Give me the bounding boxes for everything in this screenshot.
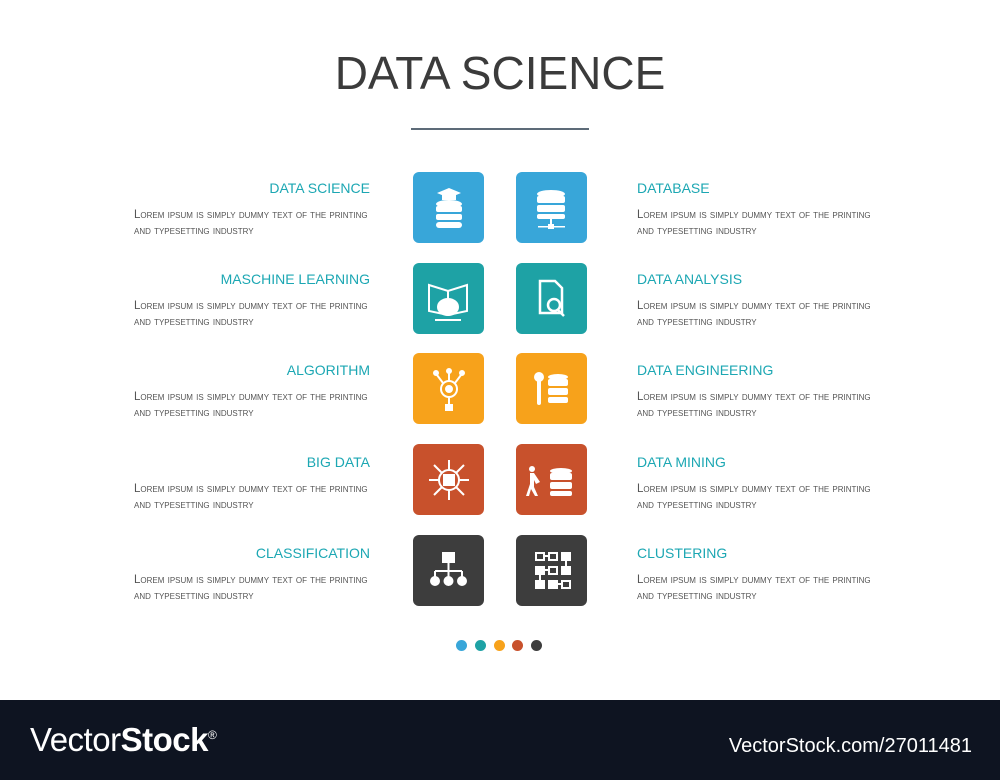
item: machine learning [134, 271, 370, 328]
item: big data: Lorem ipsum is simply dummy text of the printing [134, 483, 368, 495]
icon: clustering [516, 535, 587, 606]
item: data mining: DATA MINING [637, 454, 726, 470]
item: data science: DATA SCIENCE [269, 180, 370, 196]
item: data engineering: Lorem ipsum is simply dummy text of the printing [637, 391, 871, 403]
footer bar [0, 700, 1000, 780]
icon: data analysis [516, 263, 587, 334]
icon: database [516, 172, 587, 243]
icon: classification [413, 535, 484, 606]
icon: data mining [516, 444, 587, 515]
icon: data science [413, 172, 484, 243]
item: machine learning: and typesetting industry [134, 316, 254, 328]
item: big data [134, 454, 370, 511]
item: clustering: and typesetting industry [637, 590, 757, 602]
icon: algorithm [413, 353, 484, 424]
footer url: VectorStock.com/27011481 [729, 735, 972, 757]
item: classification: CLASSIFICATION [256, 545, 370, 561]
item: database: Lorem ipsum is simply dummy text of the printing [637, 209, 871, 221]
item: classification: and typesetting industry [134, 590, 254, 602]
item: algorithm: ALGORITHM [287, 362, 370, 378]
item: algorithm [134, 362, 370, 419]
footer logo: VectorStock® [30, 721, 216, 758]
item: database: DATABASE [637, 180, 710, 196]
item: data science [134, 180, 370, 237]
icon: data engineering [516, 353, 587, 424]
item: clustering: Lorem ipsum is simply dummy text of the printing [637, 574, 871, 586]
item: data analysis [637, 271, 871, 328]
item: machine learning: MASCHINE LEARNING [221, 271, 370, 287]
item: algorithm: and typesetting industry [134, 407, 254, 419]
item: data engineering: and typesetting industry [637, 407, 757, 419]
item: big data: and typesetting industry [134, 499, 254, 511]
item: machine learning: Lorem ipsum is simply dummy text of the printing [134, 300, 368, 312]
item: data analysis: and typesetting industry [637, 316, 757, 328]
pagination dots [456, 640, 542, 651]
item: data analysis: Lorem ipsum is simply dummy text of the printing [637, 300, 871, 312]
item: big data: BIG DATA [307, 454, 370, 470]
item: data science: and typesetting industry [134, 225, 254, 237]
item: database: and typesetting industry [637, 225, 757, 237]
item: algorithm: Lorem ipsum is simply dummy text of the printing [134, 391, 368, 403]
item: clustering: CLUSTERING [637, 545, 727, 561]
item: database [637, 180, 871, 237]
title: DATA SCIENCE [335, 47, 665, 99]
item: classification: Lorem ipsum is simply dummy text of the printing [134, 574, 368, 586]
icon: machine learning [413, 263, 484, 334]
item: data science: Lorem ipsum is simply dummy text of the printing [134, 209, 368, 221]
icon: big data [413, 444, 484, 515]
item: data mining: and typesetting industry [637, 499, 757, 511]
item: clustering [637, 545, 871, 602]
item: data engineering [637, 362, 871, 419]
item: data mining: Lorem ipsum is simply dummy text of the printing [637, 483, 871, 495]
item: data engineering: DATA ENGINEERING [637, 362, 773, 378]
item: classification [134, 545, 370, 602]
item: data analysis: DATA ANALYSIS [637, 271, 742, 287]
item: data mining [637, 454, 871, 511]
